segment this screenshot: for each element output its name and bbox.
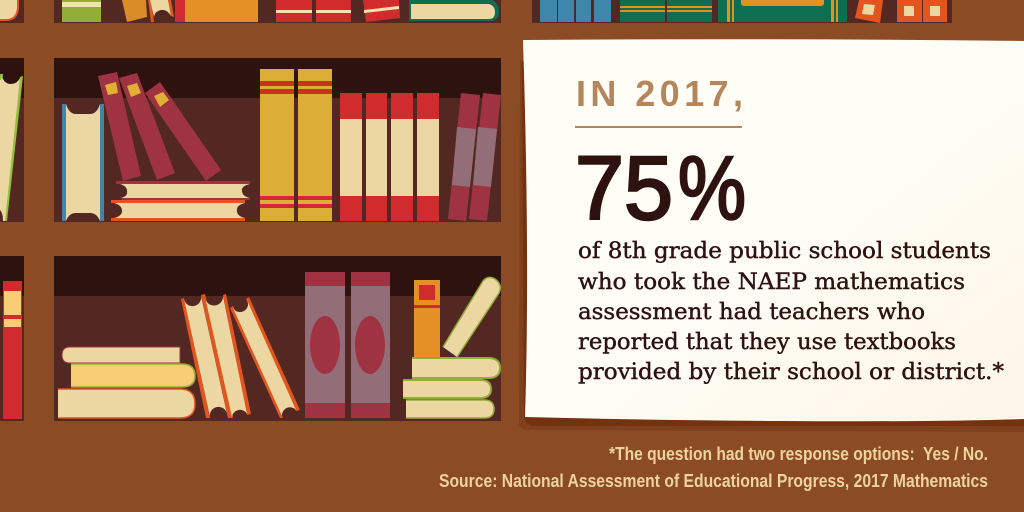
book: red left <box>3 281 22 419</box>
paper shadow <box>519 60 1024 432</box>
book: blue spine upright <box>62 104 104 221</box>
book: orange upright <box>414 280 440 360</box>
heading: year: IN 2017, <box>576 73 743 114</box>
books: two leaning maroon and grey <box>448 93 501 221</box>
statistic: 75% <box>575 139 746 239</box>
books: three leaning maroon <box>98 72 221 181</box>
books: two grey with ovals <box>305 272 390 418</box>
books: three leaning cream <box>181 294 300 418</box>
statistic: 75%: % <box>678 139 746 239</box>
books: two stacked flat cream <box>111 181 250 221</box>
panel: paper note <box>523 39 1024 421</box>
divider under year <box>575 126 742 128</box>
panel: bottom shelf row <box>0 256 501 421</box>
book: leaning cream right <box>443 277 500 357</box>
statistic: 75%: 75 <box>575 139 673 239</box>
books: green stack right <box>403 358 500 418</box>
books: four red and cream <box>340 93 439 221</box>
text block: description: provided by their school or district.* <box>578 360 1004 385</box>
text block: description <box>578 239 1004 385</box>
books: flat stack left <box>58 347 195 418</box>
text block: description: assessment had teachers who <box>578 300 925 325</box>
text block: description: of 8th grade public school students <box>578 239 991 264</box>
books: two tall yellow <box>260 69 332 221</box>
panel: middle shelf row <box>0 58 501 222</box>
text block: description: who took the NAEP mathematics <box>578 270 965 295</box>
panel: top shelf row <box>0 0 952 23</box>
text block: description: reported that they use textbooks <box>578 330 956 355</box>
book: leaning cream left <box>0 74 23 221</box>
